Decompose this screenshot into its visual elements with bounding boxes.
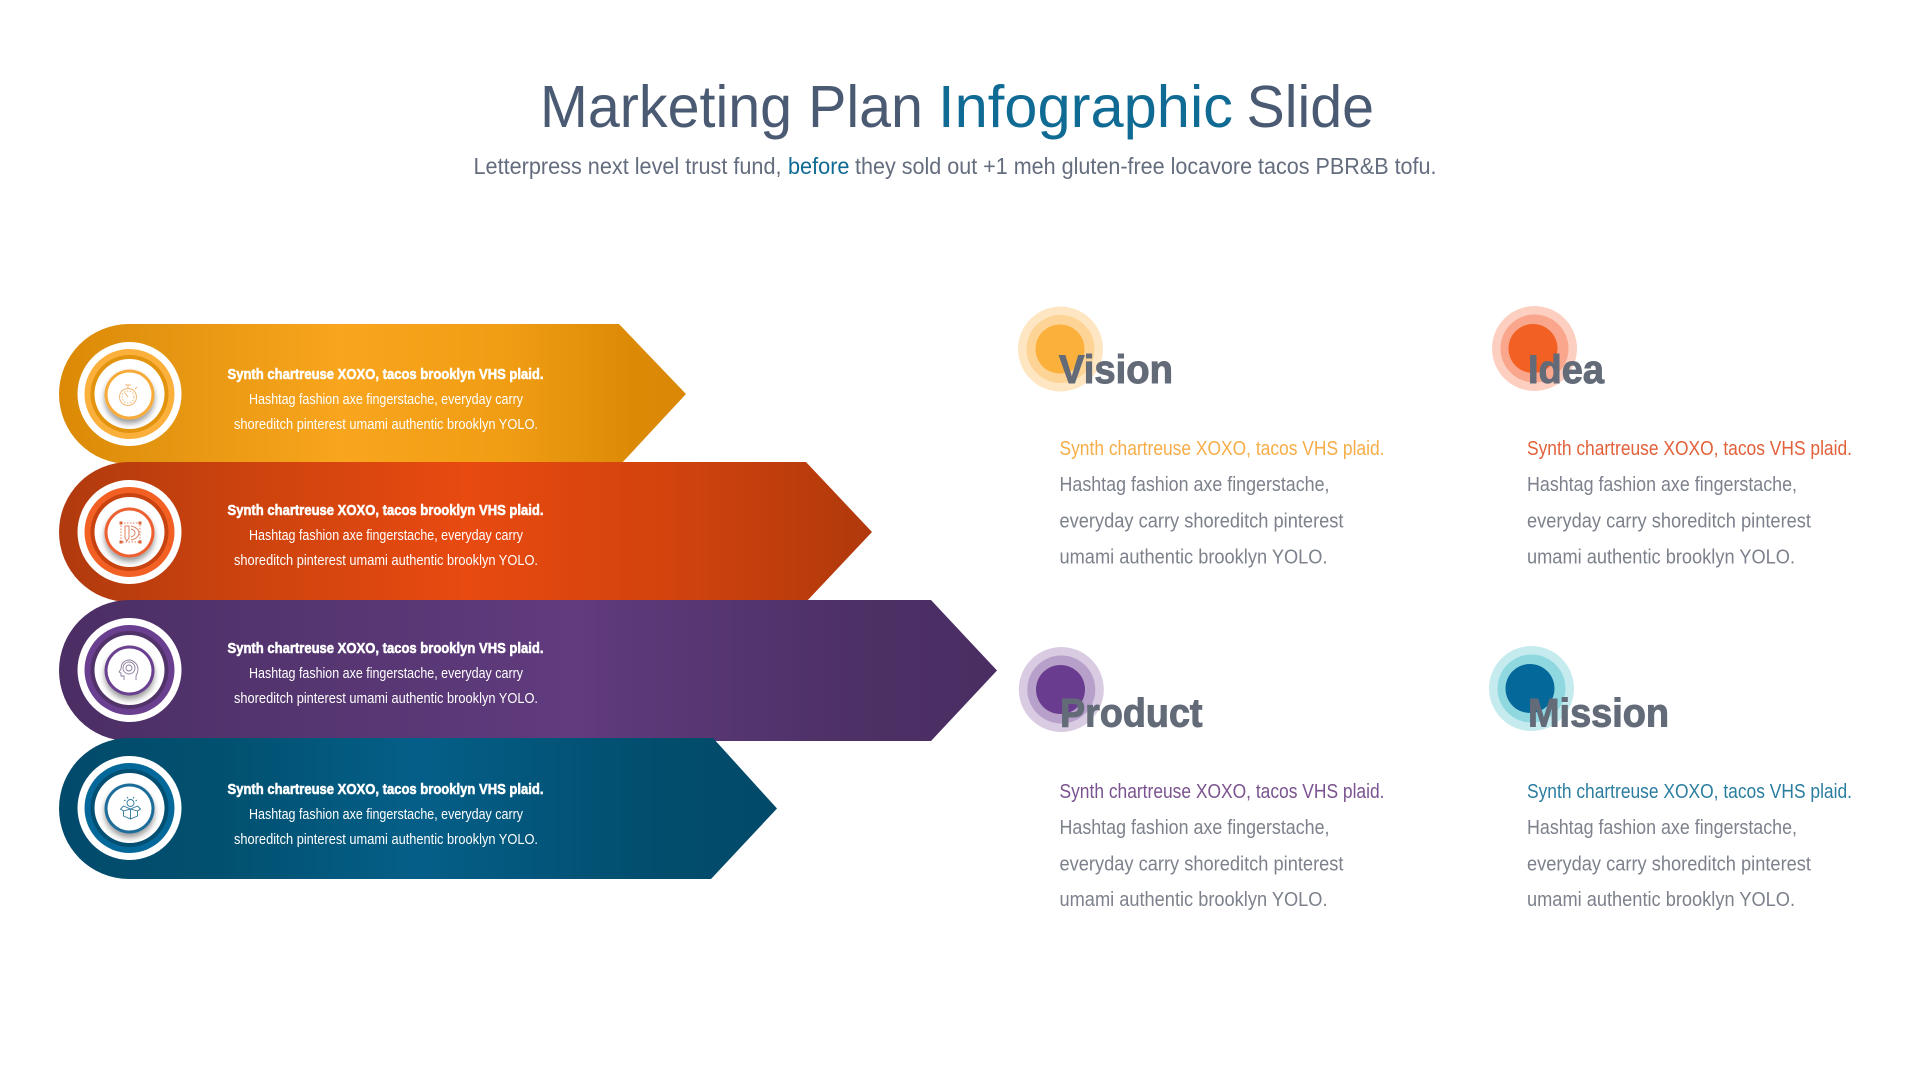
text block: amber arrow: Hashtag fashion axe fingerstache, everyday carry <box>249 392 524 408</box>
panel: orange arrow <box>59 462 872 602</box>
text block: product: everyday carry shoreditch pinterest <box>1060 854 1344 876</box>
subtitle: they sold out +1 meh gluten-free locavore tacos PBR&B tofu. <box>855 153 1436 179</box>
text block: mission: umami authentic brooklyn YOLO. <box>1527 889 1795 911</box>
title: Marketing Plan <box>540 74 923 140</box>
icon: vision concentric circles <box>1018 306 1103 392</box>
text block: product: umami authentic brooklyn YOLO. <box>1060 889 1328 911</box>
panel: teal arrow <box>59 738 777 879</box>
text block: vision <box>1060 438 1384 568</box>
text block: teal arrow: Synth chartreuse XOXO, tacos brooklyn VHS plaid. <box>228 782 544 798</box>
heading: product: Product <box>1060 692 1202 736</box>
icon: idea concentric circles <box>1492 306 1577 391</box>
subtitle: Letterpress next level trust fund, <box>474 153 782 179</box>
text block: idea: umami authentic brooklyn YOLO. <box>1527 546 1795 568</box>
title <box>540 74 1374 140</box>
text block: mission: Hashtag fashion axe fingerstache, <box>1527 817 1797 839</box>
text block: vision: Hashtag fashion axe fingerstache, <box>1060 474 1330 496</box>
text block: mission: Synth chartreuse XOXO, tacos VHS plaid. <box>1527 781 1852 803</box>
text block: teal arrow: Hashtag fashion axe fingerstache, everyday carry <box>249 807 524 823</box>
subtitle <box>474 153 1436 179</box>
text block: orange arrow: Hashtag fashion axe fingerstache, everyday carry <box>249 528 524 544</box>
text block: vision: umami authentic brooklyn YOLO. <box>1060 546 1328 568</box>
heading: vision: Vision <box>1059 348 1173 392</box>
text block: teal arrow: shoreditch pinterest umami authentic brooklyn YOLO. <box>234 832 538 848</box>
panel: vision <box>1018 306 1384 568</box>
text block: orange arrow <box>228 503 544 569</box>
icon: idea box badge <box>78 756 182 860</box>
text block: orange arrow: Synth chartreuse XOXO, tacos brooklyn VHS plaid. <box>228 503 544 519</box>
text block: product <box>1060 781 1384 911</box>
panel: purple arrow <box>59 600 997 741</box>
text block: vision: Synth chartreuse XOXO, tacos VHS plaid. <box>1060 438 1384 460</box>
panel: idea <box>1492 306 1852 568</box>
text block: purple arrow: Synth chartreuse XOXO, tacos brooklyn VHS plaid. <box>228 641 544 657</box>
title: Infographic <box>938 74 1233 140</box>
text block: mission: everyday carry shoreditch pinterest <box>1527 854 1811 876</box>
text block: purple arrow <box>228 641 544 707</box>
title: Slide <box>1246 74 1374 140</box>
text block: mission <box>1527 781 1852 911</box>
text block: idea <box>1527 438 1852 568</box>
text block: product: Hashtag fashion axe fingerstache, <box>1060 817 1330 839</box>
text block: purple arrow: Hashtag fashion axe fingerstache, everyday carry <box>249 666 524 682</box>
text block: teal arrow <box>228 782 544 848</box>
text block: product: Synth chartreuse XOXO, tacos VHS plaid. <box>1060 781 1384 803</box>
icon: design tool badge <box>78 480 182 584</box>
panel: mission <box>1489 646 1852 911</box>
text block: amber arrow: Synth chartreuse XOXO, tacos brooklyn VHS plaid. <box>228 367 544 383</box>
text block: orange arrow: shoreditch pinterest umami authentic brooklyn YOLO. <box>234 553 538 569</box>
text block: idea: Synth chartreuse XOXO, tacos VHS plaid. <box>1527 438 1852 460</box>
icon: stopwatch badge <box>78 342 182 446</box>
heading: idea: Idea <box>1528 348 1605 392</box>
panel: product <box>1019 647 1384 911</box>
icon: mission concentric circles <box>1489 646 1574 731</box>
text block: idea: Hashtag fashion axe fingerstache, <box>1527 474 1797 496</box>
heading: mission: Mission <box>1528 692 1669 736</box>
text block: amber arrow: shoreditch pinterest umami authentic brooklyn YOLO. <box>234 417 538 433</box>
text block: idea: everyday carry shoreditch pinterest <box>1527 510 1811 532</box>
subtitle: before <box>788 153 850 179</box>
panel: amber arrow <box>59 324 686 464</box>
text block: amber arrow <box>228 367 544 433</box>
text block: purple arrow: shoreditch pinterest umami authentic brooklyn YOLO. <box>234 691 538 707</box>
icon: product concentric circles <box>1019 647 1104 732</box>
icon: head maze badge <box>78 618 182 722</box>
text block: vision: everyday carry shoreditch pinterest <box>1060 510 1344 532</box>
